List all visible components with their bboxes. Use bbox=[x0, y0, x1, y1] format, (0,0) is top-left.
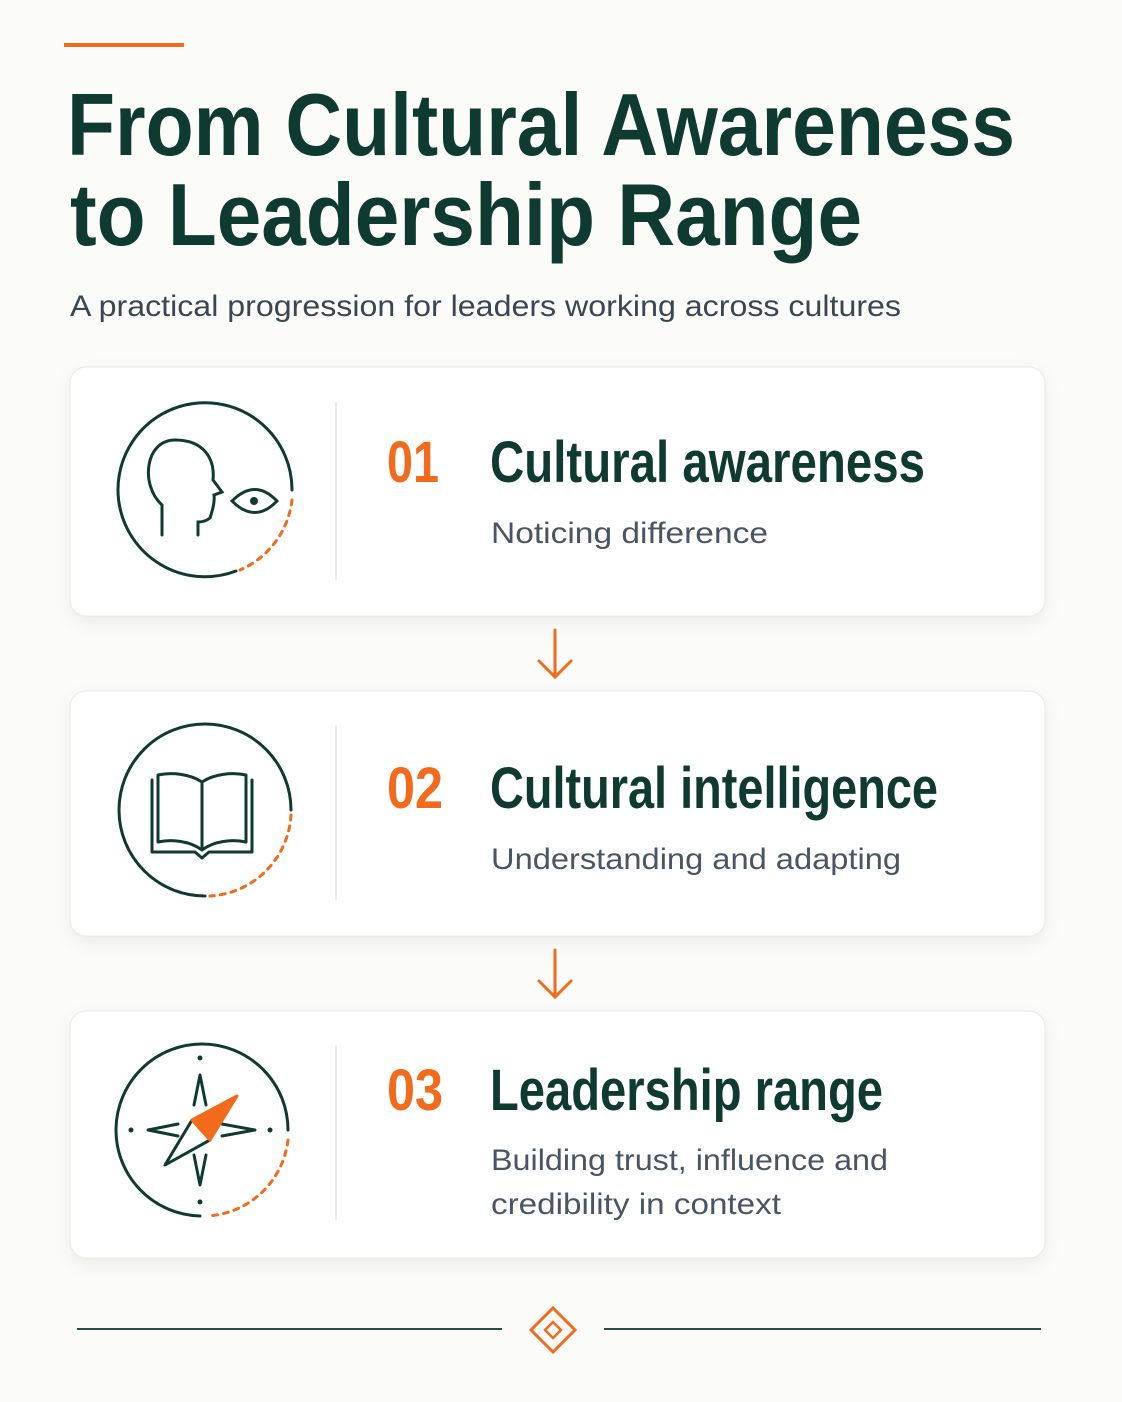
text: building trust: Building trust, influence and bbox=[491, 1144, 888, 1177]
title: From Cultural Awareness bbox=[67, 75, 1015, 174]
text: understanding and adapting: Understanding and adapting bbox=[491, 843, 901, 876]
footer divider with diamond bbox=[77, 1308, 1041, 1352]
panel: leadership range bbox=[70, 1011, 1045, 1258]
title bbox=[67, 75, 1015, 264]
text: building trust: credibility in context bbox=[491, 1188, 782, 1221]
panel: cultural awareness bbox=[70, 367, 1045, 616]
number 02: 02 bbox=[387, 756, 443, 821]
panel: cultural intelligence bbox=[70, 691, 1045, 936]
accent line bbox=[64, 43, 184, 47]
text: building trust bbox=[491, 1144, 888, 1221]
heading: leadership range: Leadership range bbox=[490, 1058, 883, 1123]
icon: head with eye bbox=[118, 403, 292, 577]
title: to Leadership Range bbox=[70, 165, 862, 264]
icon: open book bbox=[119, 724, 291, 896]
icon: compass bbox=[116, 1044, 288, 1216]
number 03: 03 bbox=[387, 1058, 443, 1123]
arrow bbox=[539, 950, 571, 997]
subtitle: A practical progression for leaders working across cultures bbox=[70, 290, 901, 323]
heading: cultural awareness: Cultural awareness bbox=[490, 430, 925, 495]
arrow bbox=[539, 630, 571, 677]
heading: cultural intelligence: Cultural intelligence bbox=[490, 756, 938, 821]
number 01: 01 bbox=[387, 430, 439, 495]
text: noticing difference: Noticing difference bbox=[491, 517, 768, 550]
